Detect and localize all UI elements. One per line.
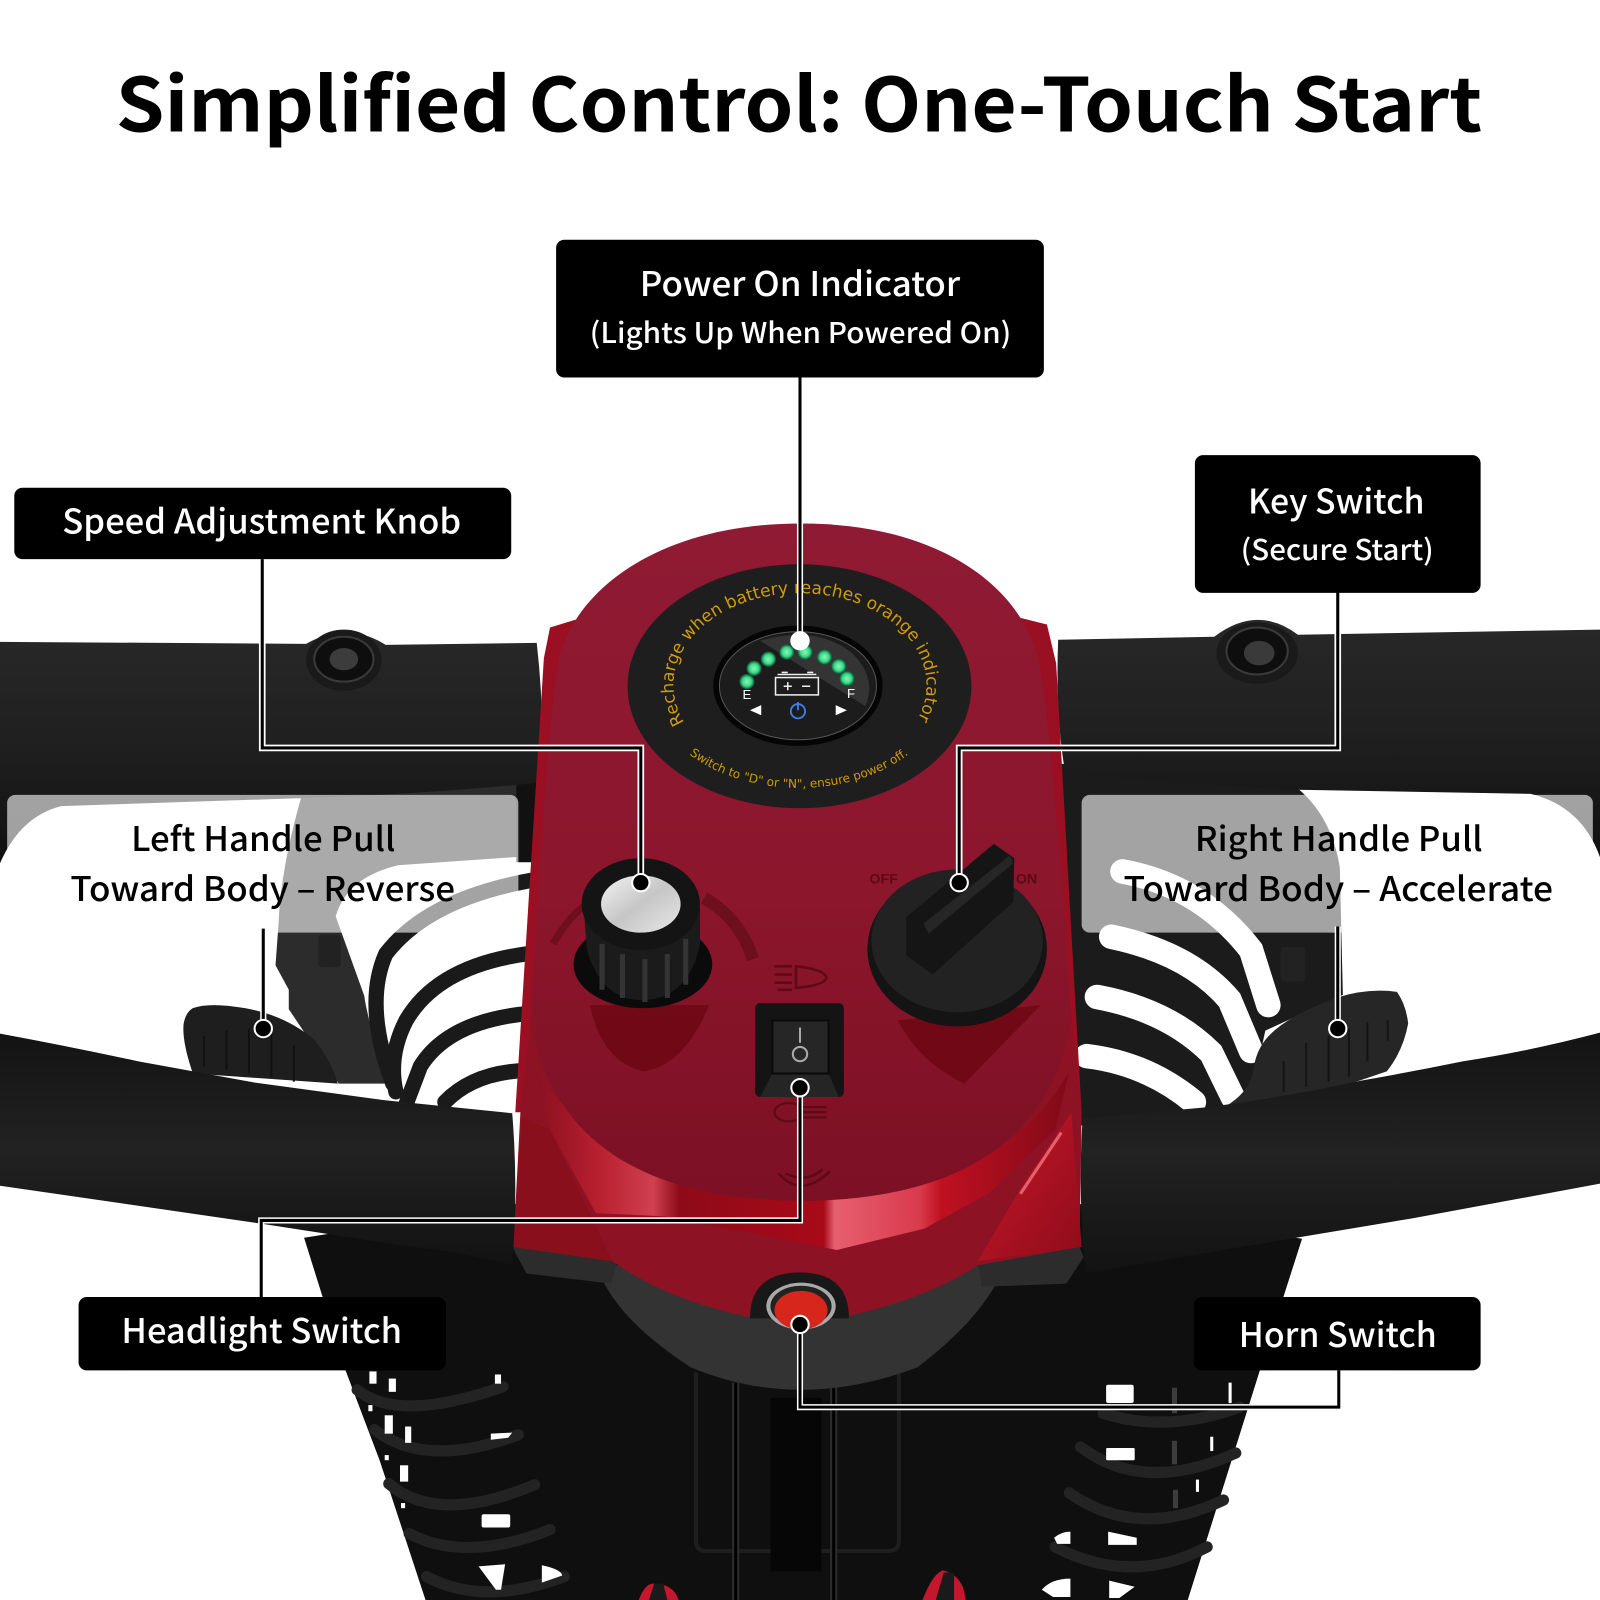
- green level lights: [739, 644, 855, 689]
- horn icon: [774, 1103, 827, 1121]
- speed knob: [553, 858, 753, 1008]
- turtle icon: [779, 1169, 830, 1186]
- lower basket: [304, 1204, 1302, 1600]
- callout: headlight switch: Headlight Switch: [121, 1304, 402, 1353]
- callout: power on indicator: Power On Indicator: [640, 257, 960, 306]
- right wing: [978, 1112, 1082, 1261]
- left brake pedal: [183, 1005, 338, 1084]
- callout: speed adjustment knob: [14, 488, 511, 559]
- left wing: [513, 1117, 612, 1261]
- console side shell: [515, 615, 1082, 1112]
- translucent label: right handle: [1082, 795, 1593, 933]
- leader line: key switch: [951, 592, 1338, 891]
- battery indicator gauge: [713, 626, 883, 746]
- leader line: headlight switch: [261, 1079, 809, 1298]
- translucent label: left handle: Left Handle Pull: [131, 812, 395, 861]
- right basket ribs: [1056, 763, 1343, 1128]
- main red plate: [531, 523, 1071, 1201]
- leader line: horn switch: [791, 1316, 1339, 1407]
- battery decal disc: [628, 564, 972, 808]
- lower underside: [597, 1265, 1005, 1390]
- curved warning text: Recharge when battery reaches orange indicator.: [660, 584, 939, 727]
- callout: key switch: [1195, 455, 1481, 593]
- leader line: power indicator: [790, 378, 810, 651]
- translucent label: left handle: Toward Body – Reverse: [70, 862, 455, 911]
- on label: ON: [1016, 872, 1037, 888]
- battery indicator gauge: E: [743, 687, 752, 702]
- callout: headlight switch: [79, 1297, 446, 1370]
- steering column and wires: [639, 1372, 965, 1600]
- right brake pedal: [1224, 991, 1408, 1117]
- callout: horn switch: [1194, 1297, 1481, 1370]
- callout: power on indicator: (Lights Up When Powered On): [590, 311, 1011, 352]
- title: Simplified Control: One-Touch Start: [116, 47, 1482, 154]
- plate shadows: [590, 1005, 1041, 1084]
- left lower handlebar: [0, 1034, 515, 1264]
- translucent label: right handle: Toward Body – Accelerate: [1123, 862, 1553, 911]
- lower red shell: [513, 1020, 1082, 1316]
- leader line: speed knob: [262, 559, 649, 891]
- right upper handlebar: [1057, 620, 1600, 857]
- translucent label: right handle: Right Handle Pull: [1195, 812, 1483, 861]
- mounting bolt left: [306, 630, 382, 691]
- leader line: left handle: [255, 929, 272, 1037]
- callout: power on indicator: [556, 240, 1044, 378]
- callout: key switch: (Secure Start): [1241, 528, 1434, 569]
- left wires: [639, 1584, 679, 1600]
- mounting bolt right: [1216, 622, 1298, 684]
- callout: key switch: Key Switch: [1248, 474, 1424, 523]
- left upper handlebar: [0, 630, 542, 863]
- off label: OFF: [869, 872, 898, 888]
- battery indicator gauge: F: [847, 686, 855, 701]
- right wires: [922, 1570, 965, 1600]
- right lower handlebar: [1081, 1033, 1600, 1273]
- callout: horn switch: Horn Switch: [1239, 1308, 1437, 1357]
- curved switch note: Switch to "D" or "N", ensure power off.: [690, 748, 908, 790]
- battery glyph: [776, 672, 818, 695]
- callout: speed adjustment knob: Speed Adjustment Knob: [62, 495, 461, 544]
- left basket ribs: [276, 781, 543, 1104]
- key switch: [867, 844, 1047, 1027]
- headlight icon: [774, 966, 827, 990]
- horn button: [750, 1272, 849, 1330]
- glossy band: [536, 1071, 1069, 1250]
- wing bumpers: [513, 1247, 1084, 1287]
- leader line: right handle: [1329, 927, 1346, 1037]
- power icon: [791, 702, 805, 718]
- translucent label: left handle: [7, 795, 518, 933]
- rocker switch: [755, 1003, 844, 1097]
